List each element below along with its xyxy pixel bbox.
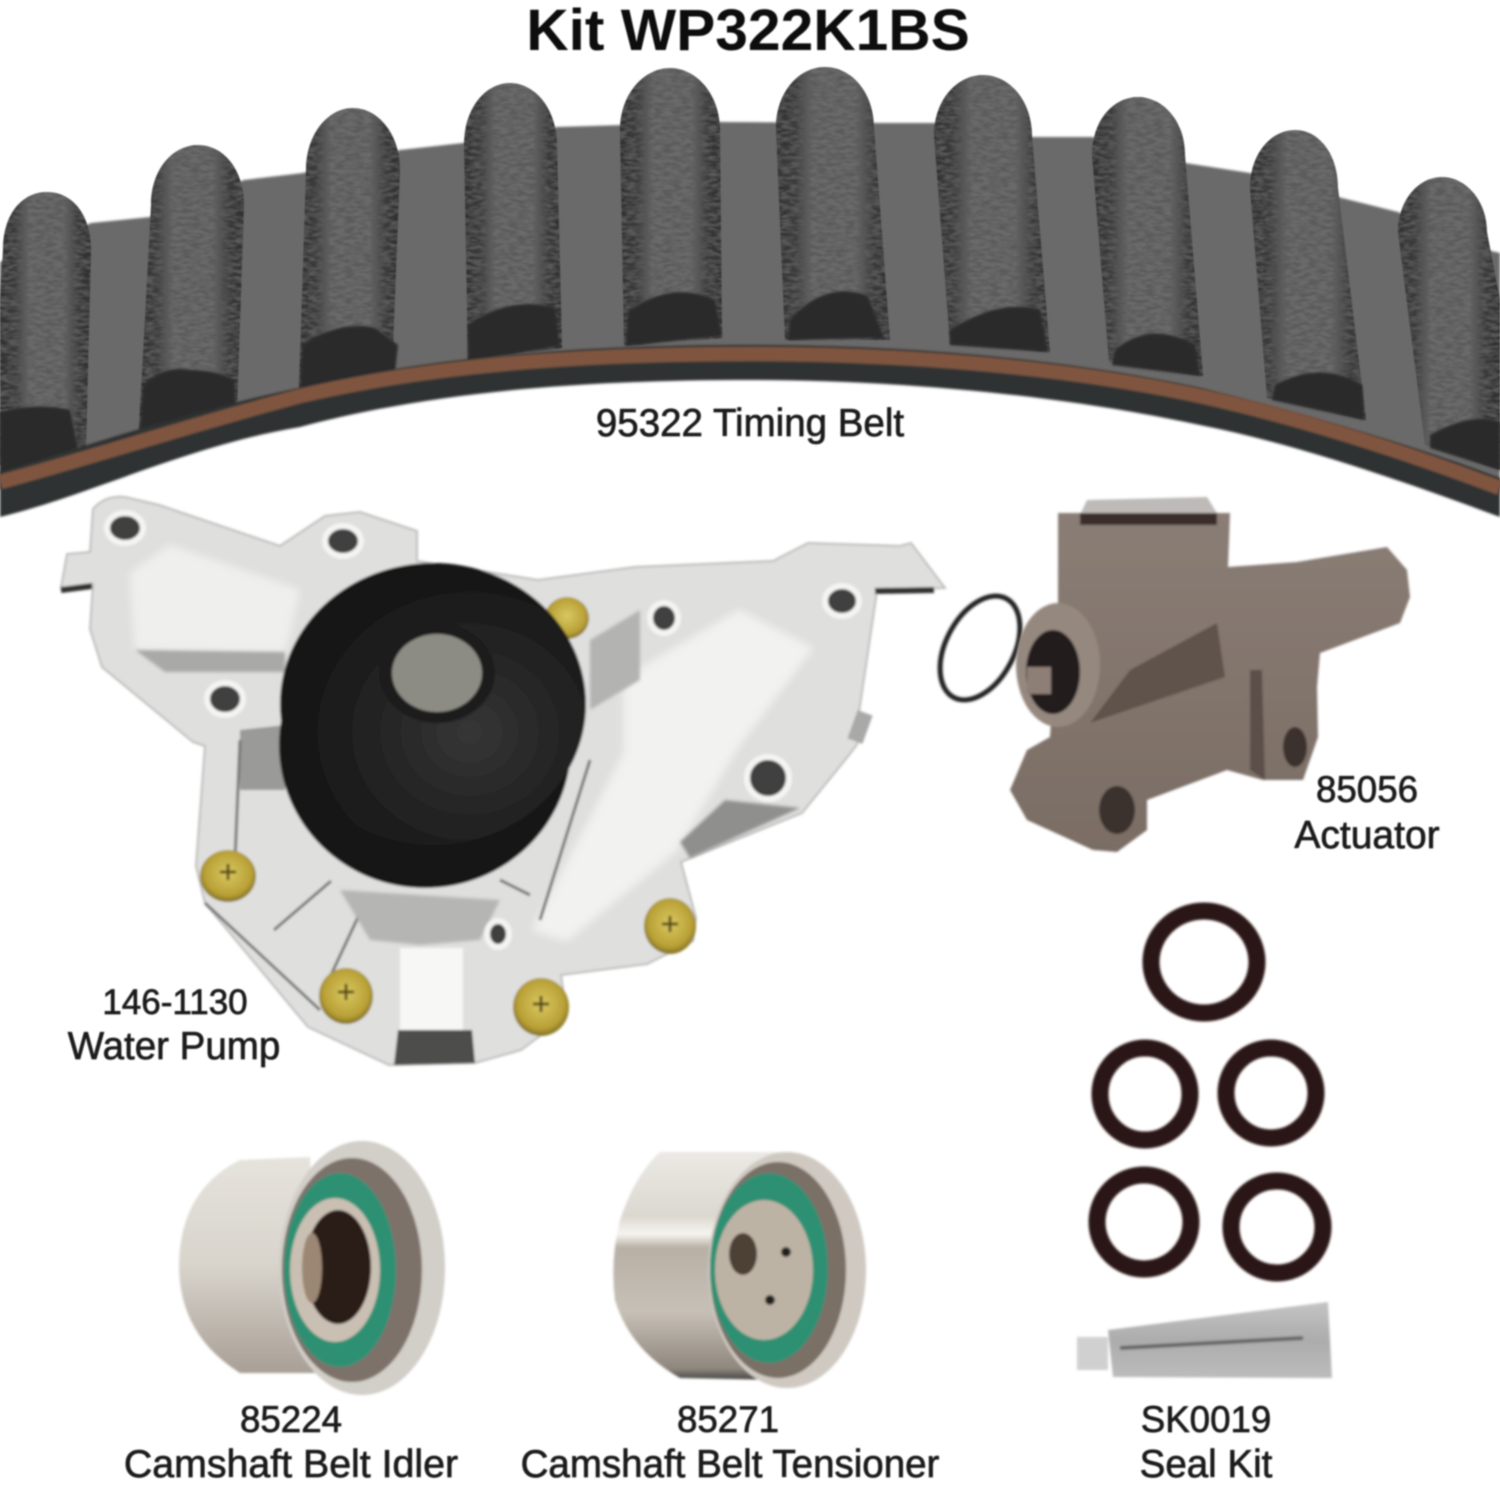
label: idler: 85224 xyxy=(240,1399,342,1440)
timing belt image xyxy=(0,67,1500,517)
o-ring xyxy=(924,583,1036,713)
ribs xyxy=(205,740,590,1010)
pulley hub xyxy=(392,634,482,712)
label: seal kit: SK0019 xyxy=(1141,1399,1271,1440)
tensioner green seal xyxy=(710,1173,828,1363)
tube print xyxy=(1120,1338,1303,1348)
centre pocket xyxy=(240,725,285,790)
pump housing xyxy=(61,497,945,1065)
sealant tube xyxy=(1077,1302,1332,1378)
seal rings xyxy=(1097,911,1323,1273)
left lobe shadow xyxy=(135,650,285,672)
brass bolt behind pulley xyxy=(545,597,589,639)
idler green seal xyxy=(284,1173,396,1367)
actuator web xyxy=(1250,670,1265,780)
spigot xyxy=(400,948,463,1030)
neck shadow xyxy=(590,610,640,710)
tensioner holes xyxy=(729,1233,757,1275)
label: water pump: Water Pump xyxy=(68,1025,280,1068)
actuator body xyxy=(1010,513,1410,852)
tab edge xyxy=(61,586,934,591)
label: actuator: Actuator xyxy=(1294,814,1440,857)
tensioner rim xyxy=(708,1152,866,1388)
brass bolts xyxy=(200,850,696,1036)
camshaft belt tensioner xyxy=(613,1152,866,1388)
spigot base xyxy=(394,1030,475,1065)
idler bore xyxy=(305,1210,371,1324)
right lobe shadow xyxy=(680,800,800,858)
pulley xyxy=(279,563,586,888)
pump shading xyxy=(61,545,934,1065)
label: seal kit: Seal Kit xyxy=(1140,1443,1273,1486)
bolt cross marks xyxy=(220,864,678,1012)
belt body xyxy=(0,122,1500,490)
lower shadow xyxy=(340,890,500,945)
actuator bore xyxy=(1026,630,1080,714)
camshaft belt idler xyxy=(179,1141,445,1395)
tooth shadows xyxy=(0,291,1500,475)
small tab xyxy=(847,710,873,744)
actuator top cap xyxy=(1080,497,1218,515)
actuator top opening xyxy=(1080,513,1217,525)
water pump image xyxy=(61,497,945,1065)
actuator shoulder xyxy=(1090,623,1225,723)
left lobe panel xyxy=(130,545,300,652)
label: water pump: 146-1130 xyxy=(102,983,248,1022)
label: tensioner: Camshaft Belt Tensioner xyxy=(521,1443,940,1486)
belt brown edge xyxy=(0,354,1500,488)
label: actuator: 85056 xyxy=(1316,769,1418,810)
actuator side boss xyxy=(1016,603,1100,727)
actuator image xyxy=(1010,497,1410,852)
label: timing belt: 95322 Timing Belt xyxy=(596,402,904,445)
pulley hub ring xyxy=(379,623,495,723)
right panel xyxy=(532,610,813,941)
tensioner sleeve xyxy=(613,1152,780,1380)
belt dark backing xyxy=(0,345,1500,517)
actuator holes xyxy=(1099,786,1135,834)
idler inner xyxy=(290,1198,380,1342)
label: tensioner: 85271 xyxy=(677,1399,779,1440)
tensioner dark ring xyxy=(710,1162,846,1378)
pump bolt holes xyxy=(107,513,859,947)
idler dark ring xyxy=(282,1158,422,1382)
idler outer sleeve xyxy=(179,1157,320,1373)
label: idler: Camshaft Belt Idler xyxy=(124,1442,458,1486)
belt teeth xyxy=(0,67,1500,470)
idler rim xyxy=(279,1141,445,1395)
tensioner plate xyxy=(715,1200,813,1340)
